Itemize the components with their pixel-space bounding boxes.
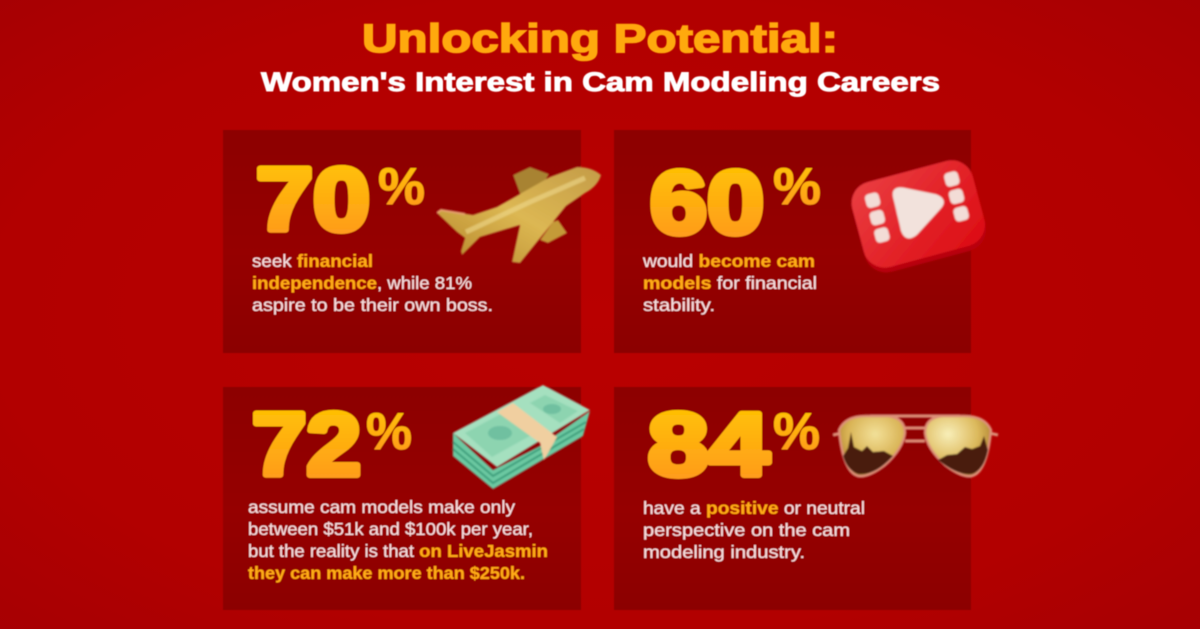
- text: financial independence: seek financial: [252, 251, 373, 271]
- text: earnings: between $51k and $100k per year,: [248, 519, 533, 539]
- panel: 60 percent: [614, 130, 991, 353]
- icon: aviator sunglasses: [833, 416, 998, 476]
- panel: 84 percent: [614, 387, 998, 610]
- title: Unlocking Potential:: [362, 17, 838, 61]
- panel: 70 percent: [223, 130, 601, 353]
- stat: 70%: [256, 149, 425, 249]
- text: positive perspective: [643, 498, 865, 562]
- title: Women's Interest in Cam Modeling Careers: [261, 67, 940, 97]
- stat: 60%: [650, 152, 821, 252]
- stat: 84%: [648, 394, 820, 494]
- icon: video player: [846, 155, 991, 277]
- text: earnings: [248, 497, 548, 583]
- text: positive perspective: modeling industry.: [643, 542, 805, 562]
- text: become cam models: [642, 251, 817, 315]
- text: positive perspective: have a positive or neutral: [643, 498, 865, 518]
- stat: 72%: 72: [252, 394, 361, 494]
- text: positive perspective: perspective on the cam: [643, 520, 850, 540]
- text: financial independence: aspire to be their own boss.: [252, 295, 493, 315]
- stat: 60%: %: [773, 158, 821, 216]
- panel: 72 percent: [223, 385, 590, 610]
- text: financial independence: independence , while 81%: [252, 273, 472, 293]
- text: financial independence: [252, 251, 493, 315]
- text: earnings: but the reality is that on LiveJasmin: [248, 541, 548, 561]
- icon: gold airplane: [437, 167, 601, 263]
- stat: 84%: 84: [648, 394, 770, 494]
- stat: 70%: 70: [256, 149, 370, 249]
- stat: 72%: [252, 394, 412, 494]
- text: become cam models: stability.: [643, 295, 715, 315]
- text: earnings: they can make more than $250k.: [248, 563, 525, 583]
- title: [261, 17, 940, 97]
- stat: 70%: %: [378, 158, 425, 216]
- stat: 60%: 60: [650, 152, 764, 252]
- text: earnings: assume cam models make only: [248, 497, 515, 517]
- text: become cam models: would become cam: [642, 251, 815, 271]
- text: become cam models: models for financial: [643, 273, 817, 293]
- icon: stack of money: [453, 385, 590, 489]
- stat: 72%: %: [366, 403, 412, 461]
- stat: 84%: %: [773, 403, 820, 461]
